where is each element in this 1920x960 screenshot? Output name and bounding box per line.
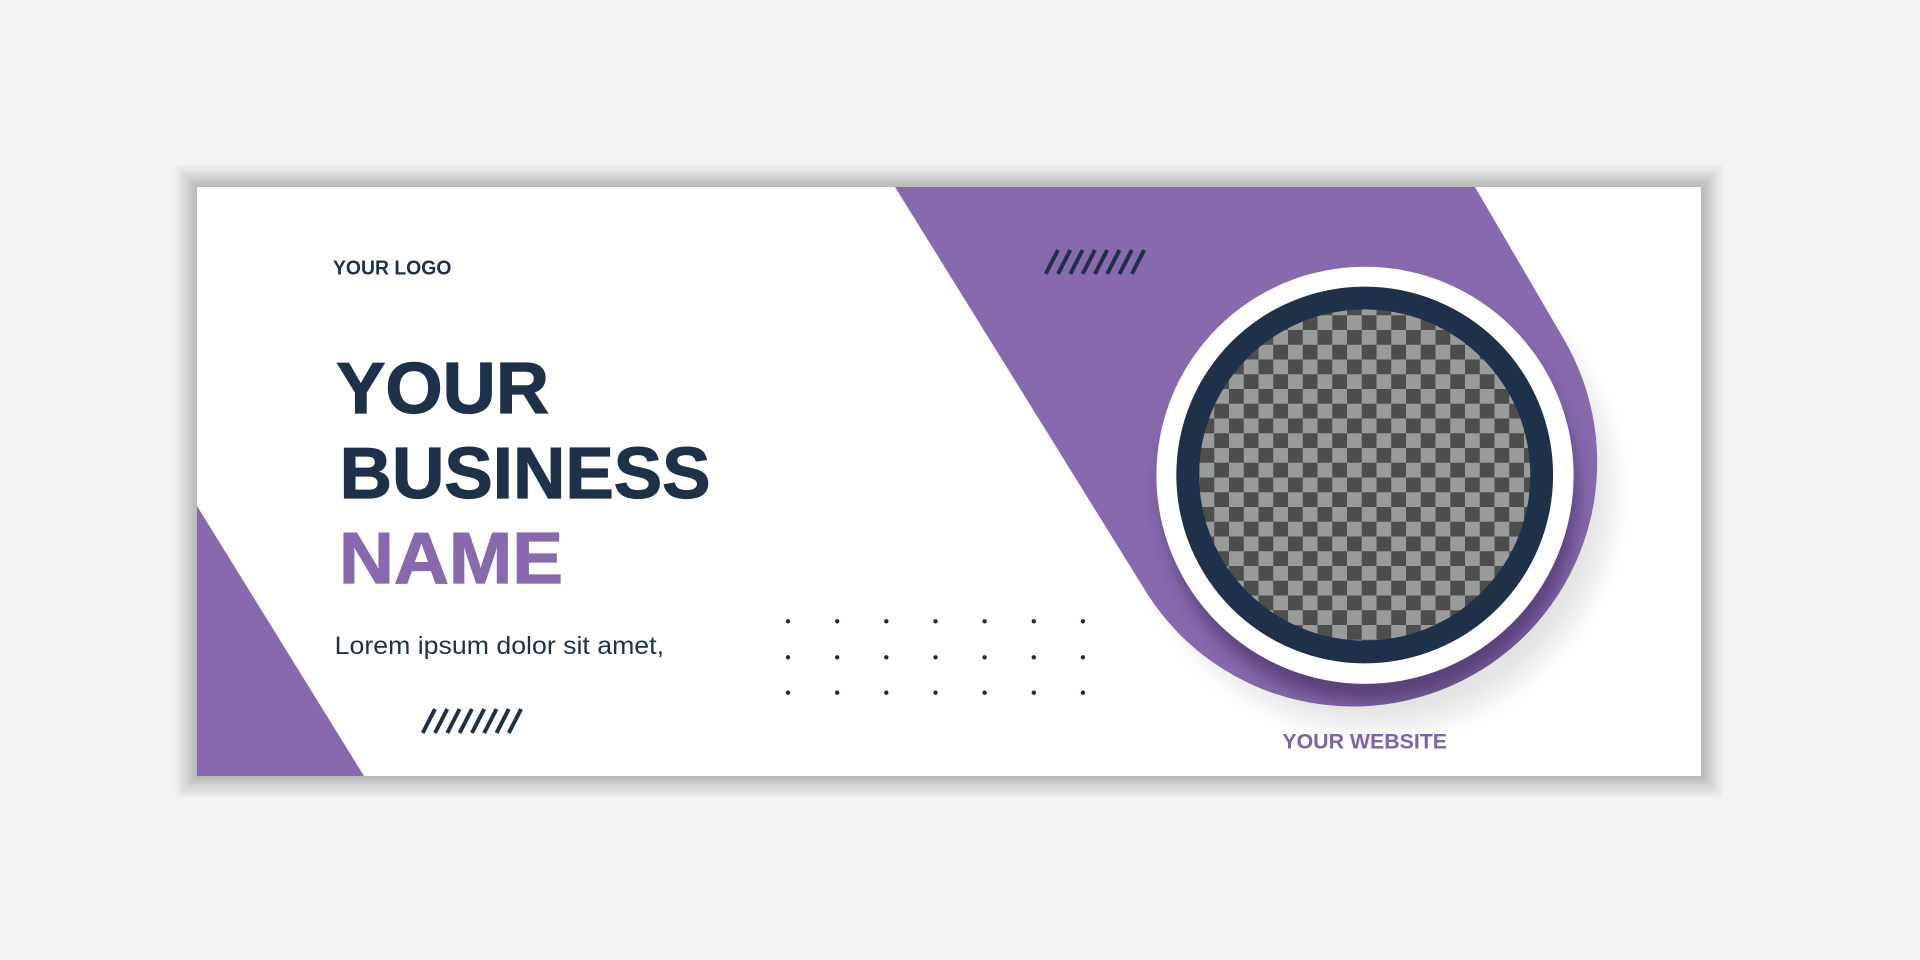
title: YOUR [336, 349, 549, 429]
soft shadow on white below the purple shape [1183, 351, 1616, 734]
photo frame: white ring [1156, 267, 1574, 684]
title: BUSINESS [340, 434, 711, 514]
card frame shadow [175, 165, 1723, 798]
title: NAME [339, 519, 563, 599]
circle shadow on purple shape [1156, 378, 1586, 706]
photo frame: navy ring [1176, 287, 1553, 663]
logo text: YOUR LOGO [333, 258, 451, 280]
tagline: Lorem ipsum dolor sit amet, [335, 632, 664, 660]
banner card [197, 187, 1701, 776]
photo placeholder checkerboard [1199, 309, 1530, 641]
dot grid [786, 619, 1085, 695]
title [336, 349, 711, 599]
decorative slashes top [1046, 250, 1144, 274]
left purple triangle [197, 506, 364, 776]
website text: YOUR WEBSITE [1282, 731, 1447, 754]
decorative slashes bottom [423, 709, 521, 733]
purple diagonal shape [895, 187, 1597, 706]
